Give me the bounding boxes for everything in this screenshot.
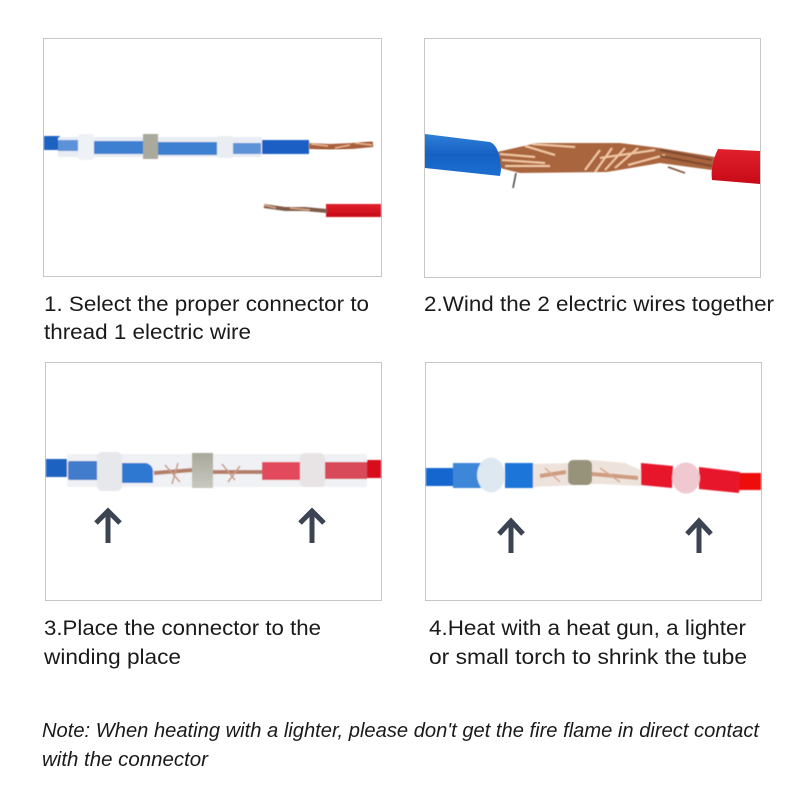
arrow left: [96, 511, 120, 543]
caption 1: thread 1 electric wire: [44, 321, 251, 344]
caption 4: or small torch to shrink the tube: [429, 646, 747, 669]
panel 1: select connector: [44, 38, 382, 276]
caption 3: [43, 617, 321, 669]
red wire with copper strands: [264, 204, 381, 217]
caption 1: 1. Select the proper connector to: [44, 293, 369, 316]
copper twist: [497, 143, 715, 188]
note: with the connector: [42, 749, 209, 771]
shrunk connector: [426, 458, 761, 494]
panel 4: heat and shrink: [426, 362, 762, 600]
caption 1: [44, 293, 369, 344]
note: [42, 720, 760, 771]
caption 4: 4.Heat with a heat gun, a lighter: [429, 617, 746, 640]
caption 3: winding place: [43, 646, 181, 669]
arrow right: [687, 521, 711, 553]
note: Note: When heating with a lighter, please don't get the fire flame in direct contact: [42, 720, 760, 742]
caption 4: [429, 617, 747, 669]
caption 3: 3.Place the connector to the: [44, 617, 321, 640]
blue wire end: [425, 134, 501, 176]
caption 2: 2.Wind the 2 electric wires together: [424, 293, 774, 316]
blue wire with connector: [44, 134, 309, 160]
copper strands, upper: [309, 143, 373, 148]
panel 2: wind wires: [424, 38, 760, 278]
panel 3: place connector: [46, 362, 382, 600]
arrow left: [499, 521, 523, 553]
arrow right: [300, 511, 324, 543]
red wire end: [712, 149, 760, 184]
connector on wires: [46, 452, 381, 491]
